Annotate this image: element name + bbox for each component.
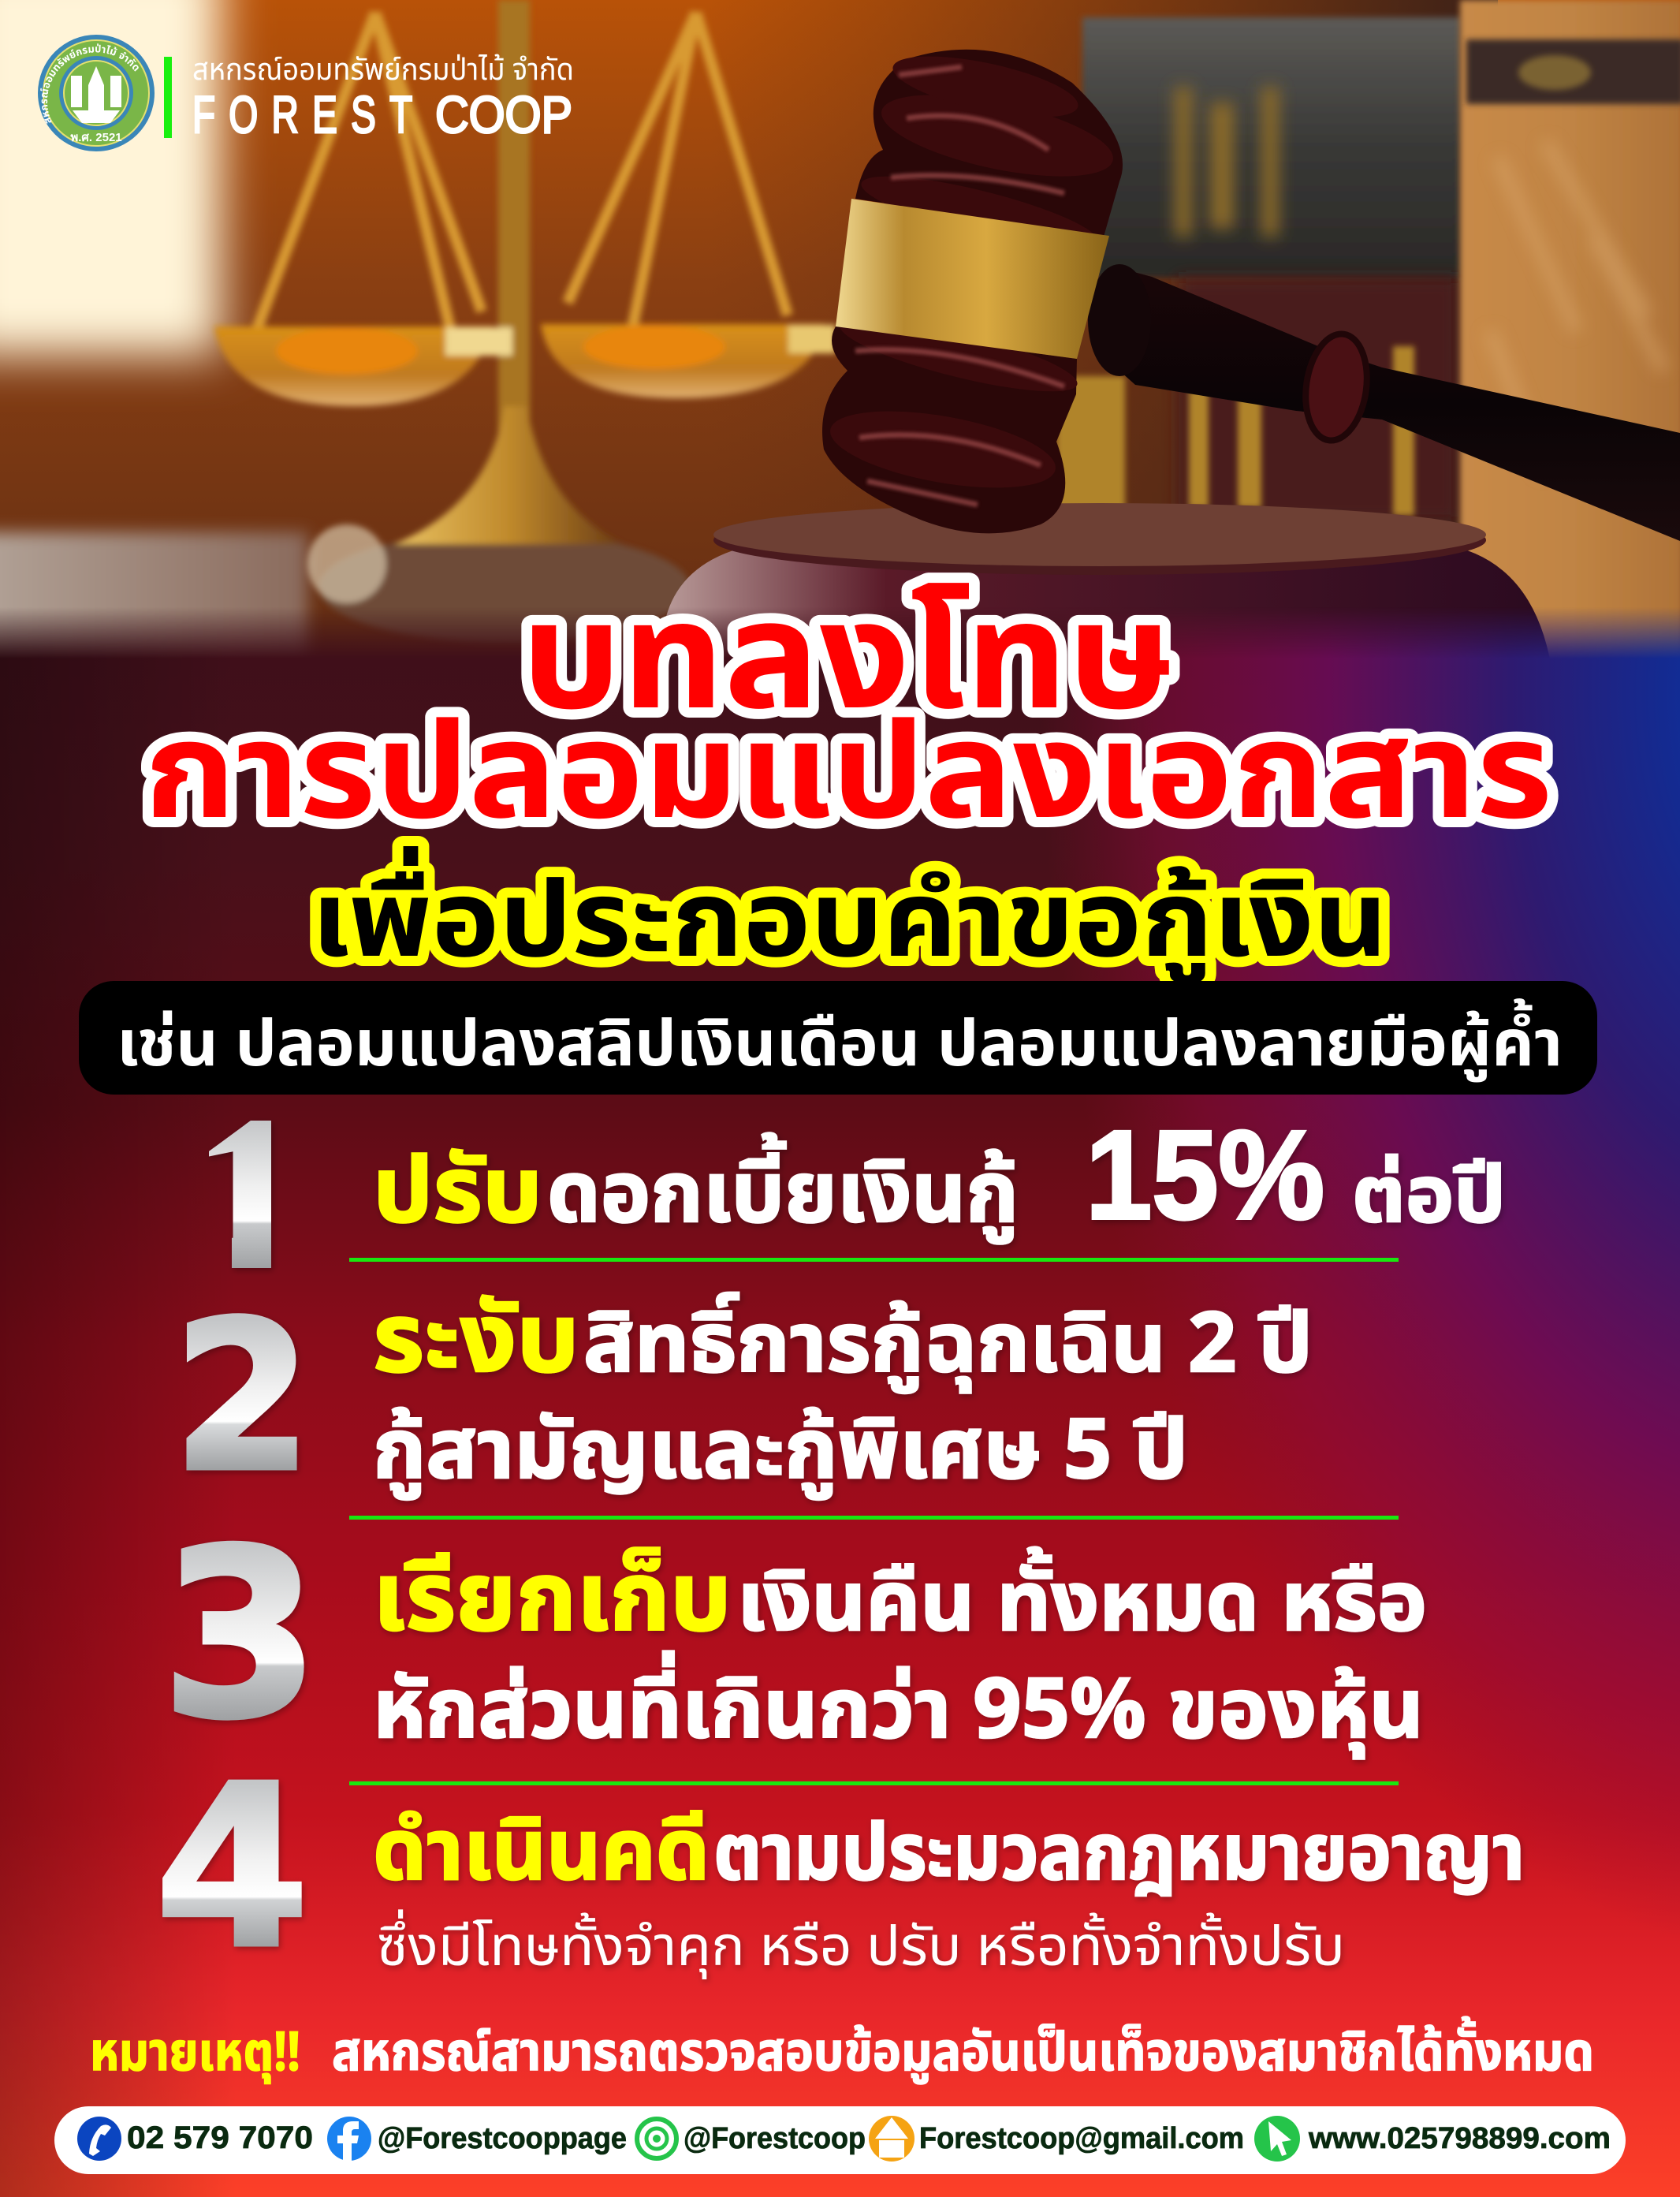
item 1 text: ต่อปี: [1352, 1138, 1506, 1257]
title line 3: เพื่อประกอบคำขอกู้เงิน: [311, 845, 1388, 1004]
item 3 text: [373, 1528, 1427, 1775]
forest coop wordmark: COOP: [435, 85, 572, 144]
note: [90, 2013, 1594, 2094]
item 3 text: หักส่วนที่เกินกว่า 95% ของหุ้น: [373, 1651, 1424, 1775]
examples pill: เช่น ปลอมแปลงสลิปเงินเดือน ปลอมแปลงลายมือผู้ค้ำ: [117, 997, 1563, 1095]
item 2 text: สิทธิ์การกู้ฉุกเฉิน 2 ปี: [583, 1285, 1313, 1409]
item 4 text: ตามประมวลกฎหมายอาญา: [713, 1796, 1525, 1915]
contact: email: Forestcoop@gmail.com: [919, 2122, 1244, 2155]
forest coop wordmark: FOREST: [192, 86, 426, 144]
divider 1: [349, 1258, 1399, 1262]
item 3 text: เรียกเก็บ: [373, 1528, 732, 1673]
contact: facebook: [327, 2117, 627, 2161]
chrome numeral 3: 3: [162, 1501, 319, 1769]
tan book at right: [1460, 0, 1680, 710]
background photo: gavel and scales: [0, 0, 1680, 710]
logo: พ.ศ. 2521: [70, 131, 122, 144]
item 4 text: [373, 1789, 1525, 1990]
contact: phone: [77, 2117, 313, 2161]
contact: facebook: @Forestcooppage: [378, 2122, 627, 2155]
logo: สหกรณ์ออมทรัพย์กรมป่าไม้ จำกัด: [40, 43, 139, 124]
item 1 text: [373, 1104, 1506, 1263]
item 2 text: ระงับ: [373, 1270, 579, 1415]
red blue gradient panel: [0, 599, 1680, 2197]
gavel head: [822, 44, 1123, 533]
contact: at-sign line: @Forestcoop: [684, 2122, 866, 2155]
title line 2: การปลอมแปลงเอกสาร: [144, 675, 1552, 878]
gavel block: [665, 544, 1553, 678]
item 3: [162, 1501, 1427, 1775]
item 4: [155, 1739, 1525, 1997]
item 1 text: ดอกเบี้ยเงินกู้: [547, 1131, 1019, 1260]
item 1 text: ปรับ: [373, 1125, 542, 1263]
title line 1: บทลงโทษ: [521, 548, 1175, 775]
chrome numeral 4: 4: [155, 1739, 309, 1997]
contact: website: [1254, 2116, 1611, 2162]
item 2 text: [373, 1270, 1313, 1516]
cream window light: [0, 0, 221, 355]
item 2 text: กู้สามัญและกู้พิเศษ 5 ปี: [373, 1391, 1188, 1516]
chrome numeral 2: 2: [173, 1279, 311, 1516]
thai organisation name: สหกรณ์ออมทรัพย์กรมป่าไม้ จำกัด: [192, 49, 574, 94]
chrome numeral 1: 1: [180, 1081, 320, 1316]
contact bar: [54, 2106, 1626, 2174]
item 4 text: ดำเนินคดี: [373, 1789, 710, 1918]
contact: email: [869, 2116, 1244, 2162]
logo: [38, 35, 155, 151]
item 4 text: ซึ่งมีโทษทั้งจำคุก หรือ ปรับ หรือทั้งจำทั้งปรับ: [377, 1907, 1345, 1990]
logo emblem: [71, 66, 121, 123]
forest coop wordmark: [192, 85, 572, 144]
item 1 text: 15%: [1086, 1104, 1324, 1245]
gavel handle: [1119, 268, 1680, 541]
contact: at-sign line: [637, 2119, 866, 2158]
blurred dark book: [1082, 17, 1461, 278]
contact: website: www.025798899.com: [1308, 2122, 1611, 2155]
organisation name: [192, 49, 574, 144]
item 2: [173, 1270, 1313, 1516]
note label: หมายเหตุ!!: [90, 2013, 300, 2094]
logo divider bar: [164, 57, 172, 138]
item 1: [209, 1121, 1504, 1273]
item 3 text: เงินคืน ทั้งหมด หรือ: [737, 1543, 1427, 1668]
brass scale: [214, 0, 836, 643]
contact: phone: 02 579 7070: [127, 2121, 313, 2155]
divider 2: [349, 1516, 1399, 1520]
main title: [144, 548, 1552, 1004]
divider 3: [349, 1781, 1399, 1785]
